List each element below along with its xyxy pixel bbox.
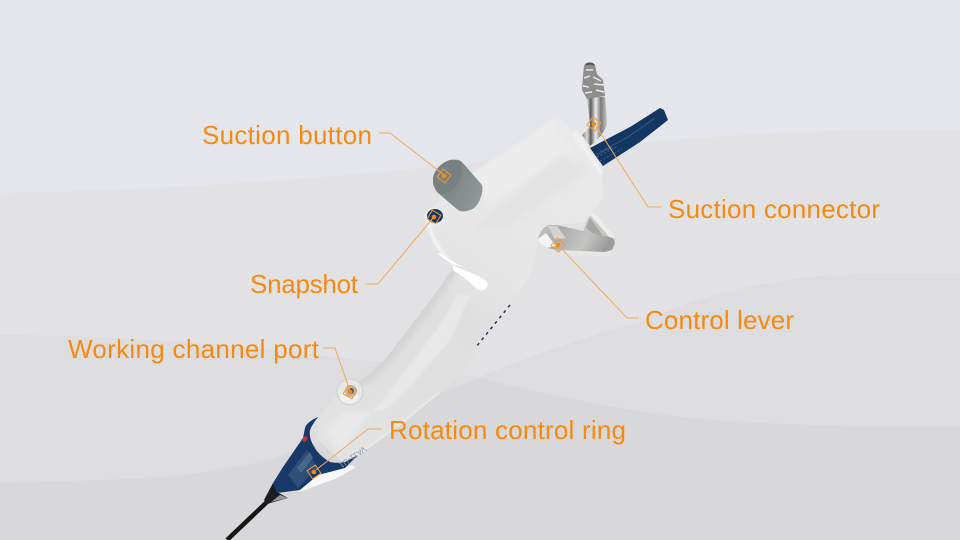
handle shading near upper edge (357, 267, 453, 382)
control lever: shadow (558, 250, 612, 256)
white collar under ring (298, 465, 355, 492)
callout: Suction connector (587, 117, 880, 224)
lower white rim (358, 393, 440, 456)
callout: Control lever: Control lever (645, 305, 794, 335)
control lever: front part (538, 225, 615, 252)
suction connector: blue boot (590, 108, 668, 166)
callout: Suction button (202, 120, 451, 183)
callout: Snapshot: Snapshot (250, 269, 359, 299)
suction button (433, 160, 482, 212)
control lever: rear part (583, 212, 616, 246)
handle light strip (421, 302, 462, 360)
callout: Snapshot (250, 210, 441, 299)
suction connector: metal tube (582, 62, 607, 146)
grip serration (476, 305, 510, 347)
callout: Suction button: Suction button (202, 120, 372, 150)
notch highlight (453, 266, 488, 290)
device: endoscope handle (227, 62, 668, 540)
callout: Working channel port: Working channel port (68, 334, 320, 364)
collar section highlights (325, 412, 372, 452)
callout: Working channel port (68, 334, 357, 399)
body panels and highlights (358, 224, 462, 455)
rotation control ring (273, 417, 358, 493)
snapshot button (424, 208, 444, 226)
working channel port (337, 379, 363, 405)
tip cone (264, 483, 288, 504)
ring model lettering: VA11-U1 (337, 444, 368, 470)
left rim (428, 220, 456, 267)
cable (227, 501, 268, 540)
callout: Control lever (551, 238, 794, 335)
callout: Rotation control ring: Rotation control ring (389, 415, 626, 445)
callout: Suction connector: Suction connector (668, 194, 880, 224)
body shell (318, 117, 603, 464)
callout: Rotation control ring (307, 415, 626, 479)
